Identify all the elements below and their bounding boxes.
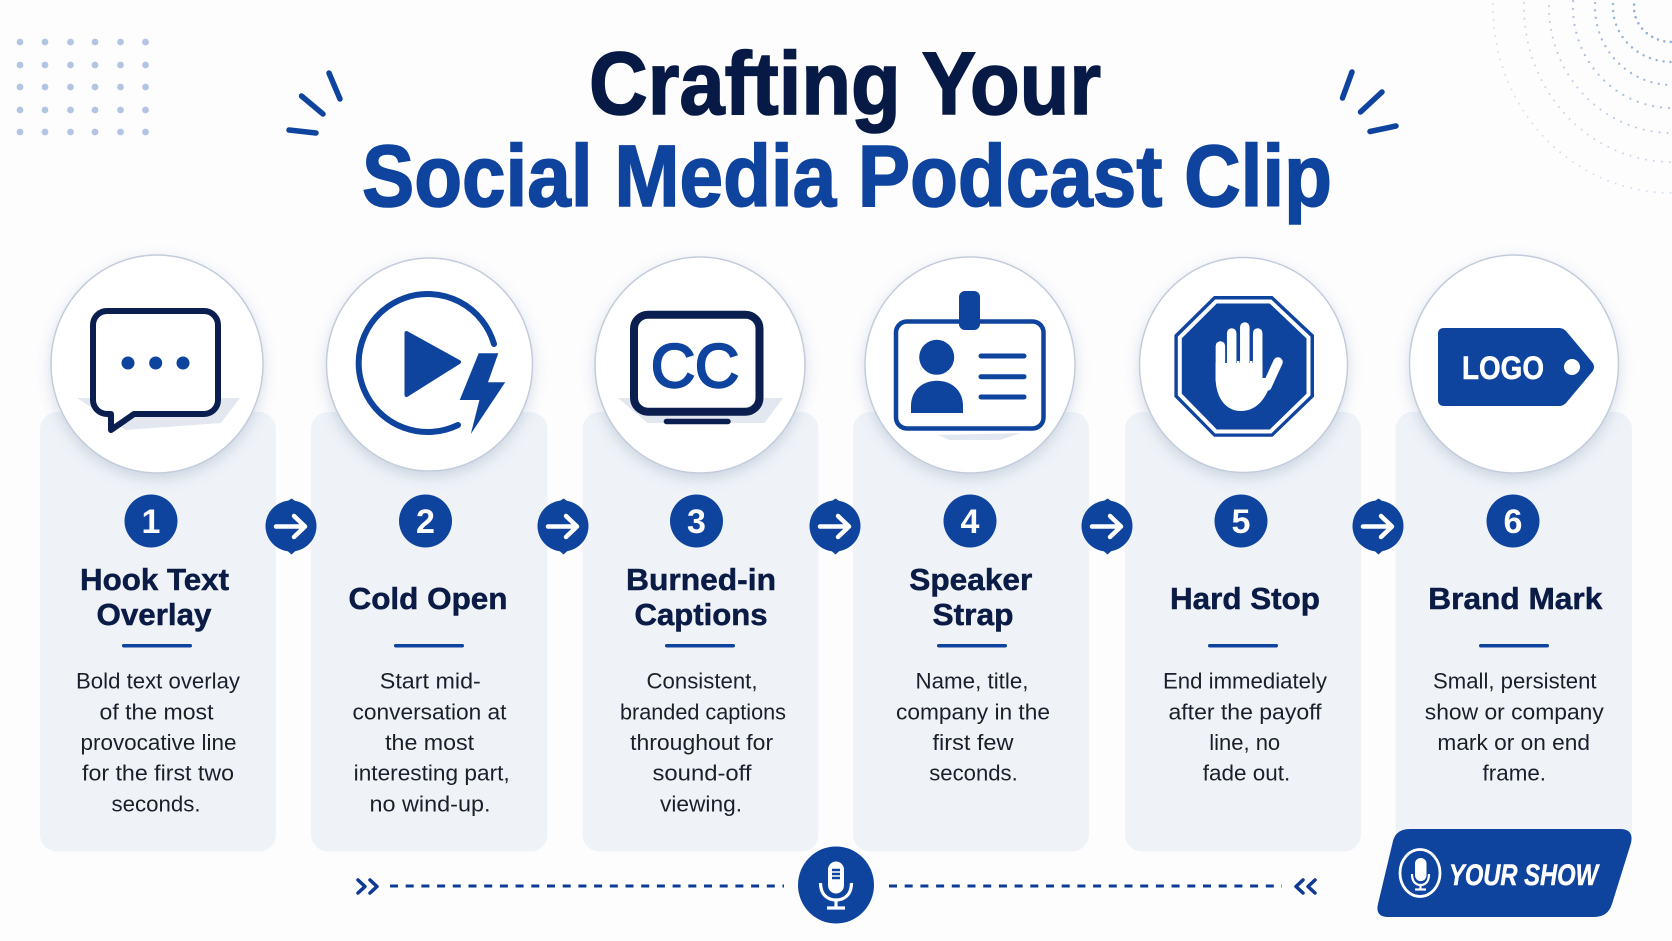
description 6: mark or on end (1437, 730, 1590, 755)
description 5 (1163, 668, 1327, 786)
icon: badge microphone (1400, 850, 1440, 896)
number badge 4: 4 (961, 503, 980, 541)
description 5: End immediately (1163, 668, 1327, 694)
heading: burned-in captions (626, 562, 776, 632)
description 2 (352, 668, 510, 816)
heading: cold open: Cold Open (348, 581, 508, 616)
heading: hook text overlay (80, 562, 229, 632)
number badge 1: 1 (142, 503, 160, 541)
number badge 1 (124, 494, 178, 548)
arrow 4 to 5 (1082, 498, 1132, 554)
number badge 3: 3 (687, 503, 706, 541)
description 3: Consistent, (646, 668, 758, 694)
icon circle: cc screen (595, 257, 805, 473)
dot grid decoration (17, 39, 149, 135)
number badge 6 (1486, 494, 1540, 548)
panel: step 2 cold open (311, 258, 548, 852)
concentric dotted arcs decoration (1493, 0, 1672, 193)
description 4: first few (932, 730, 1014, 755)
description 1: seconds. (112, 792, 200, 816)
icon circle: logo tag (1410, 255, 1618, 473)
arrow 5 to 6 (1352, 498, 1404, 554)
heading: hook text overlay: Hook Text (80, 562, 229, 597)
your show badge (1377, 829, 1632, 917)
description 2: the most (385, 730, 474, 755)
description 4: Name, title, (916, 668, 1028, 694)
icon circle: stop hand (1140, 258, 1348, 472)
number badge 5: 5 (1232, 503, 1250, 541)
description 6: show or company (1425, 700, 1604, 724)
description 3: throughout for (630, 730, 773, 755)
description 1: of the most (100, 700, 214, 724)
description 3: viewing. (660, 792, 742, 816)
title: Crafting Your (589, 33, 1101, 133)
heading: speaker strap: Speaker (909, 562, 1032, 597)
number badge 3 (670, 494, 723, 548)
description 5: fade out. (1203, 760, 1290, 786)
number badge 6: 6 (1504, 503, 1522, 541)
panel: step 6 brand mark (1396, 255, 1632, 835)
icon circle: play with bolt (326, 258, 532, 471)
heading: burned-in captions: Captions (634, 597, 768, 632)
description 2: conversation at (352, 700, 506, 724)
description 6: frame. (1483, 760, 1546, 786)
number badge 4 (944, 494, 996, 548)
number badge 2: 2 (416, 503, 435, 541)
heading: brand mark: Brand Mark (1428, 581, 1603, 616)
icon circle: cc screen: CC (651, 332, 739, 400)
description 2: Start mid- (380, 668, 481, 694)
description 1: for the first two (82, 760, 234, 786)
description 6 (1425, 668, 1604, 786)
bottom timeline: dashes, chevrons and microphone (358, 846, 1315, 924)
arrow 3 to 4 (810, 498, 860, 554)
description 6: Small, persistent (1433, 668, 1597, 694)
heading: speaker strap: Strap (932, 597, 1014, 632)
arrow 2 to 3 (538, 498, 588, 554)
heading: speaker strap (909, 562, 1032, 632)
description 3: sound-off (652, 760, 752, 786)
description 4 (896, 668, 1050, 786)
description 4: company in the (896, 700, 1050, 724)
heading: burned-in captions: Burned-in (626, 562, 776, 597)
icon: microphone circle (798, 846, 874, 924)
description 2: interesting part, (354, 760, 510, 786)
description 1: Bold text overlay (76, 668, 240, 694)
icon circle: logo tag: LOGO (1462, 350, 1544, 386)
panel: step 4 speaker strap (853, 257, 1089, 852)
description 1: provocative line (80, 730, 236, 755)
description 3: branded captions (620, 700, 786, 724)
title: Social Media Podcast Clip (362, 128, 1332, 225)
number badge 2 (399, 494, 452, 548)
description 3 (620, 668, 786, 816)
your show badge: YOUR SHOW (1449, 859, 1600, 892)
number badge 5 (1214, 494, 1268, 548)
description 1 (76, 668, 240, 816)
right accent sparks (1342, 72, 1396, 132)
left accent sparks (289, 73, 340, 133)
description 4: seconds. (929, 760, 1018, 786)
description 5: line, no (1209, 730, 1280, 755)
heading: hard stop: Hard Stop (1170, 581, 1320, 616)
description 5: after the payoff (1168, 700, 1322, 724)
arrow 1 to 2 (266, 498, 316, 554)
heading: hook text overlay: Overlay (96, 597, 212, 632)
description 2: no wind-up. (370, 792, 490, 816)
icon circle: id badge (865, 257, 1075, 473)
panel: step 3 burned-in captions (582, 257, 818, 852)
panel: step 5 hard stop (1125, 258, 1361, 852)
icon circle: speech bubble (51, 255, 263, 473)
title (362, 33, 1332, 225)
panel: step 1 hook text overlay (40, 255, 276, 852)
